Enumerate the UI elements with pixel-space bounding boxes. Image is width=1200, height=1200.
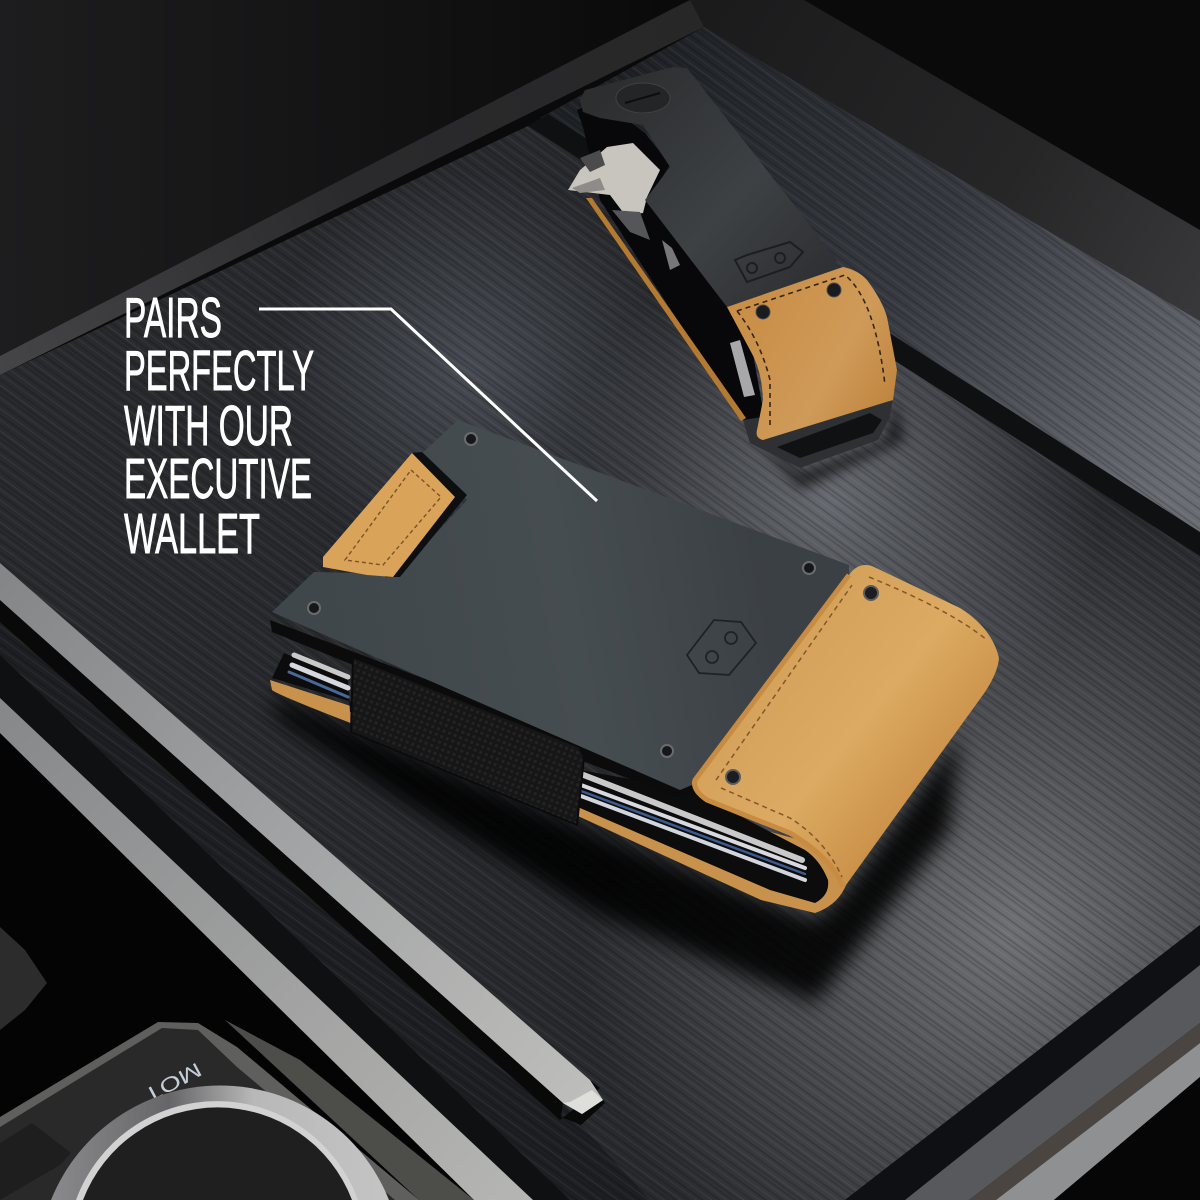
callout text: WITH OUR <box>124 394 293 458</box>
callout text: PAIRS <box>124 286 222 350</box>
wallet <box>270 420 999 913</box>
keys <box>568 143 660 240</box>
callout text: EXECUTIVE <box>124 447 312 511</box>
leather flap <box>694 565 999 887</box>
cards <box>289 655 805 880</box>
plate screws <box>308 433 815 757</box>
upper right panel <box>540 27 1200 540</box>
logo <box>735 242 803 282</box>
flap stitching <box>716 577 987 877</box>
metal plate <box>272 420 849 790</box>
lower right seam and trim <box>845 925 1200 1200</box>
lower console gloss <box>0 733 474 1200</box>
flap screws <box>726 586 878 784</box>
callout text <box>124 286 314 566</box>
wallet shadow <box>270 695 960 1003</box>
notch shadow <box>385 452 467 577</box>
strap screws <box>756 283 841 319</box>
leather pull tab <box>323 453 455 577</box>
textured band <box>225 1020 474 1200</box>
silver key inside <box>730 340 755 397</box>
logo <box>687 620 756 675</box>
leather seat <box>0 927 47 1030</box>
silver bar <box>0 563 603 1114</box>
felt interior <box>272 653 828 903</box>
silver trim strip <box>0 698 533 1200</box>
key organizer <box>568 67 897 468</box>
flap lip <box>694 575 849 887</box>
leather strap <box>727 267 897 440</box>
leather underside <box>270 680 846 913</box>
callout text: WALLET <box>124 502 260 566</box>
dial ring <box>51 1086 389 1200</box>
dark strip between bars <box>0 600 650 1200</box>
label: MOT: MOT <box>140 1058 205 1106</box>
dial face <box>83 1107 352 1200</box>
right trim <box>690 0 1200 321</box>
body <box>577 100 765 420</box>
dark door wall <box>0 0 674 356</box>
lower leather edge <box>586 198 746 421</box>
key organizer shadow <box>740 400 905 490</box>
plate <box>580 67 837 307</box>
panel seam <box>528 114 1200 556</box>
elastic band <box>351 657 584 825</box>
stitching <box>737 275 885 425</box>
dial inner rim <box>76 1101 358 1200</box>
callout text: PERFECTLY <box>124 339 314 403</box>
callout leader line <box>259 309 597 501</box>
upper trim <box>0 0 704 375</box>
plate underside edge <box>270 620 697 797</box>
screw <box>616 83 670 113</box>
clip loop <box>743 397 893 468</box>
control pad <box>0 1022 419 1200</box>
inner key <box>662 240 680 270</box>
